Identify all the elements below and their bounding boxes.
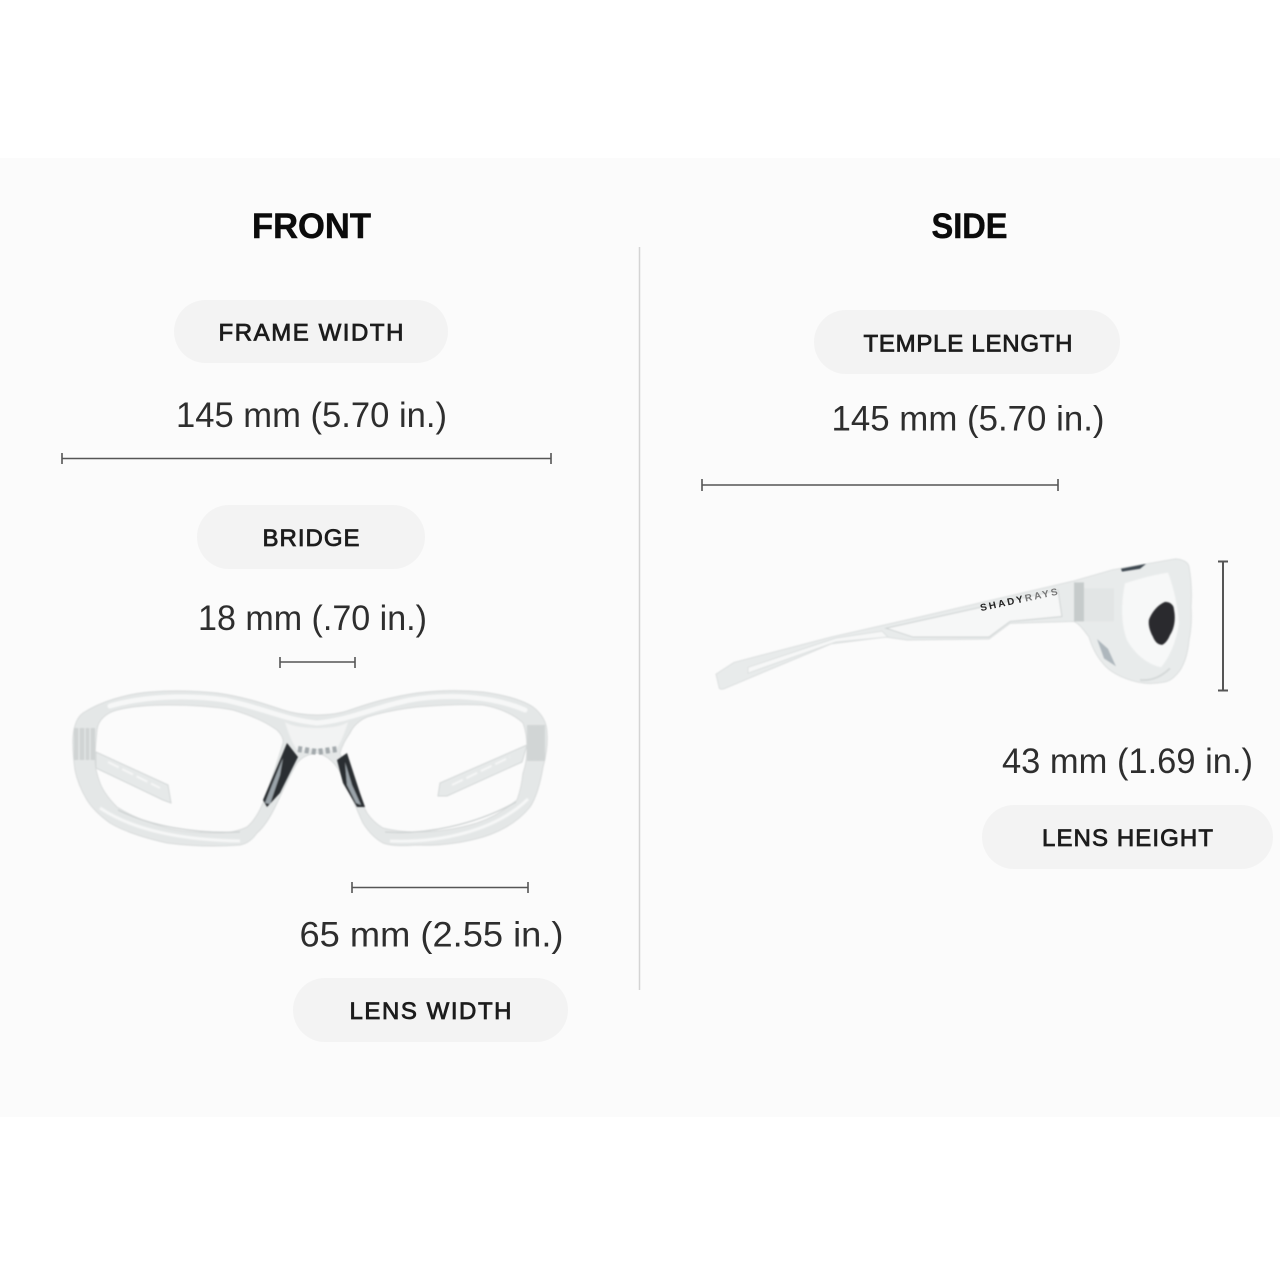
value: lens width: 65 mm (2.55 in.) xyxy=(300,916,564,954)
pill: temple length xyxy=(814,310,1120,374)
value: bridge: 18 mm (.70 in.) xyxy=(198,599,427,638)
pill: bridge xyxy=(197,505,425,569)
temple panel xyxy=(886,590,1062,637)
nose pads xyxy=(263,743,365,807)
pill: frame width: FRAME WIDTH xyxy=(218,320,404,346)
value: temple length: 145 mm (5.70 in.) xyxy=(832,400,1104,438)
pill: temple length: TEMPLE LENGTH xyxy=(864,330,1072,358)
pill: frame width xyxy=(174,300,448,363)
dimension line: lens height xyxy=(1218,561,1228,691)
pill: lens width xyxy=(293,978,568,1042)
dimension line: lens width xyxy=(352,882,528,893)
heading: side: SIDE xyxy=(932,207,1008,246)
value: lens height: 43 mm (1.69 in.) xyxy=(1002,742,1253,781)
heading: front: FRONT xyxy=(252,207,371,246)
background panel xyxy=(0,158,1280,1117)
dimension line: temple length xyxy=(702,479,1058,491)
temple arms xyxy=(96,752,171,803)
nose pad xyxy=(1149,602,1175,645)
glasses: side view xyxy=(716,559,1191,689)
hinges xyxy=(74,728,95,760)
panel: front view xyxy=(62,207,568,1042)
dimension line: bridge xyxy=(280,657,355,668)
lens xyxy=(1122,573,1179,667)
rim highlight xyxy=(110,697,525,723)
pill: lens width: LENS WIDTH xyxy=(350,998,512,1025)
temple logo: SHADYRAYS xyxy=(979,587,1059,614)
pill: lens height xyxy=(982,805,1273,869)
pill: lens height: LENS HEIGHT xyxy=(1042,825,1213,852)
dimension line: frame width xyxy=(62,453,551,464)
panel: side view xyxy=(702,207,1273,869)
pill: bridge: BRIDGE xyxy=(262,525,360,552)
hinge xyxy=(1074,582,1084,621)
glasses: front view xyxy=(73,691,547,846)
value: frame width: 145 mm (5.70 in.) xyxy=(176,396,447,435)
